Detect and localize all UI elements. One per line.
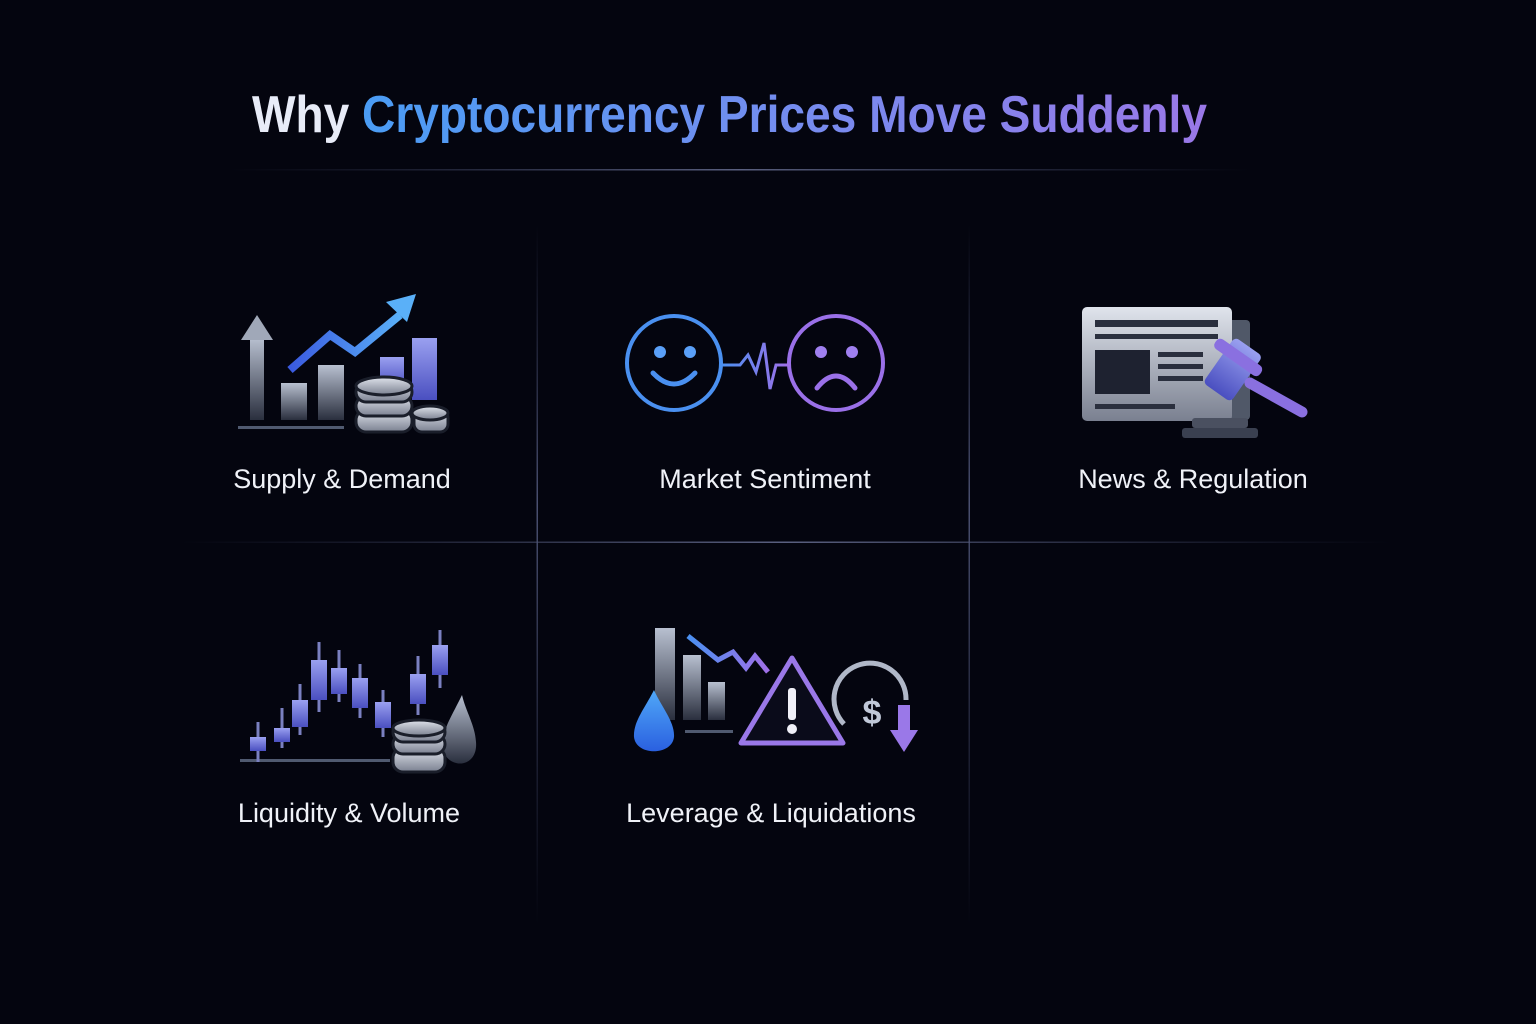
icon: faces: [627, 316, 883, 410]
label: news & regulation: News & Regulation: [1078, 464, 1308, 494]
label: supply & demand: Supply & Demand: [233, 464, 451, 494]
panel: leverage & liquidations: [626, 628, 918, 828]
panel: news & regulation: [1078, 307, 1308, 494]
icon: leverage warning: $: [863, 694, 882, 732]
label: liquidity & volume: Liquidity & Volume: [238, 798, 460, 828]
icon: candlesticks: [240, 630, 476, 772]
icon: leverage warning: [634, 628, 918, 752]
label: market sentiment: Market Sentiment: [659, 464, 871, 494]
panel: supply & demand: [233, 294, 451, 494]
title: Why Cryptocurrency Prices Move Suddenly: [252, 86, 1207, 144]
icon: supply chart: [238, 294, 448, 432]
icon: newspaper and gavel: [1082, 307, 1302, 438]
panel: liquidity & volume: [238, 630, 476, 828]
panel: market sentiment: [627, 316, 883, 494]
label: leverage & liquidations: Leverage & Liquidations: [626, 798, 916, 828]
